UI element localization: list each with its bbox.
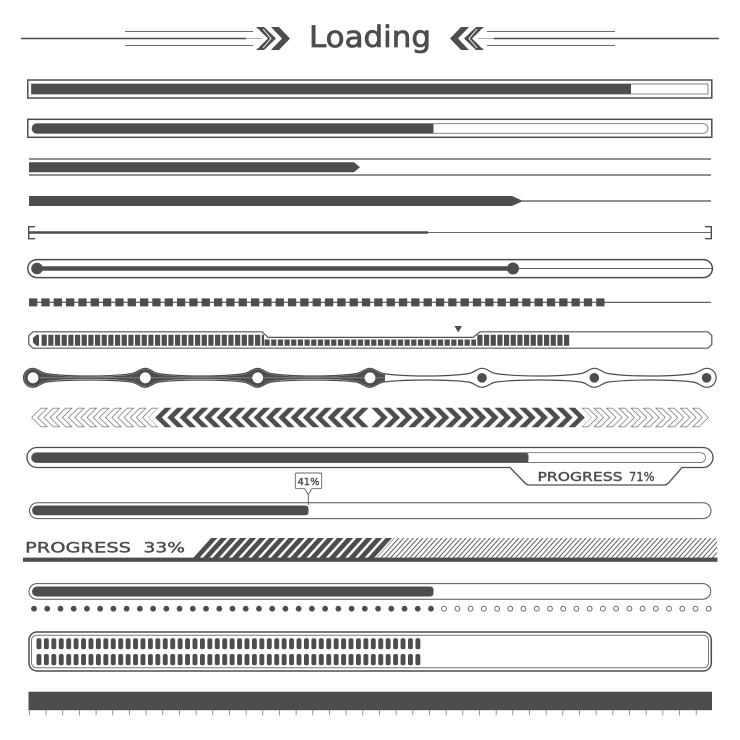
progress bar 13: hatched band with progress 33% <box>23 538 718 562</box>
progress bar 1: rectangular frame <box>28 80 712 98</box>
progress bar 14: slim pill <box>29 584 711 599</box>
progress bar 2: frame with rounded fill <box>28 119 712 137</box>
label: progress 71% <box>538 469 654 484</box>
label: progress 33% <box>25 540 185 556</box>
progress bar 8: stepped segment bar <box>29 326 712 348</box>
progress bar 5: bracketed line <box>29 227 711 239</box>
label: progress 71%: 71% <box>629 469 654 484</box>
progress bar 11: pill with progress tab <box>27 448 713 485</box>
progress bar 12: pill with 41% callout <box>30 473 711 519</box>
marker triangle <box>454 326 462 332</box>
progress bar 3: arrow between two lines <box>29 159 711 175</box>
progress bar 4: spear on a line <box>29 196 711 206</box>
title: Loading <box>309 20 431 54</box>
progress bar 6: pill with knob <box>28 260 712 278</box>
callout: 41% <box>295 473 322 505</box>
progress bar 7: square dashes on a line <box>29 301 711 303</box>
header lines left <box>21 32 262 46</box>
progress bar 17: solid bar with ruler ticks <box>28 692 712 713</box>
progress bar 16: double row of pills in frame <box>29 632 711 671</box>
heading: Loading with arrows <box>21 20 719 54</box>
label: progress 71%: PROGRESS <box>538 469 622 484</box>
progress bar 15: row of dots <box>34 606 711 611</box>
icon: double chevron right <box>256 27 290 50</box>
progress bar 9: node chain <box>23 368 716 387</box>
callout: 41%: 41% <box>298 477 320 488</box>
label: progress 33%: PROGRESS <box>25 540 131 556</box>
progress bar 10: chevrons pointing outward from the center <box>31 408 709 427</box>
label: progress 33%: 33% <box>144 540 185 556</box>
header lines right <box>478 32 719 46</box>
icon: double chevron left <box>450 27 484 50</box>
